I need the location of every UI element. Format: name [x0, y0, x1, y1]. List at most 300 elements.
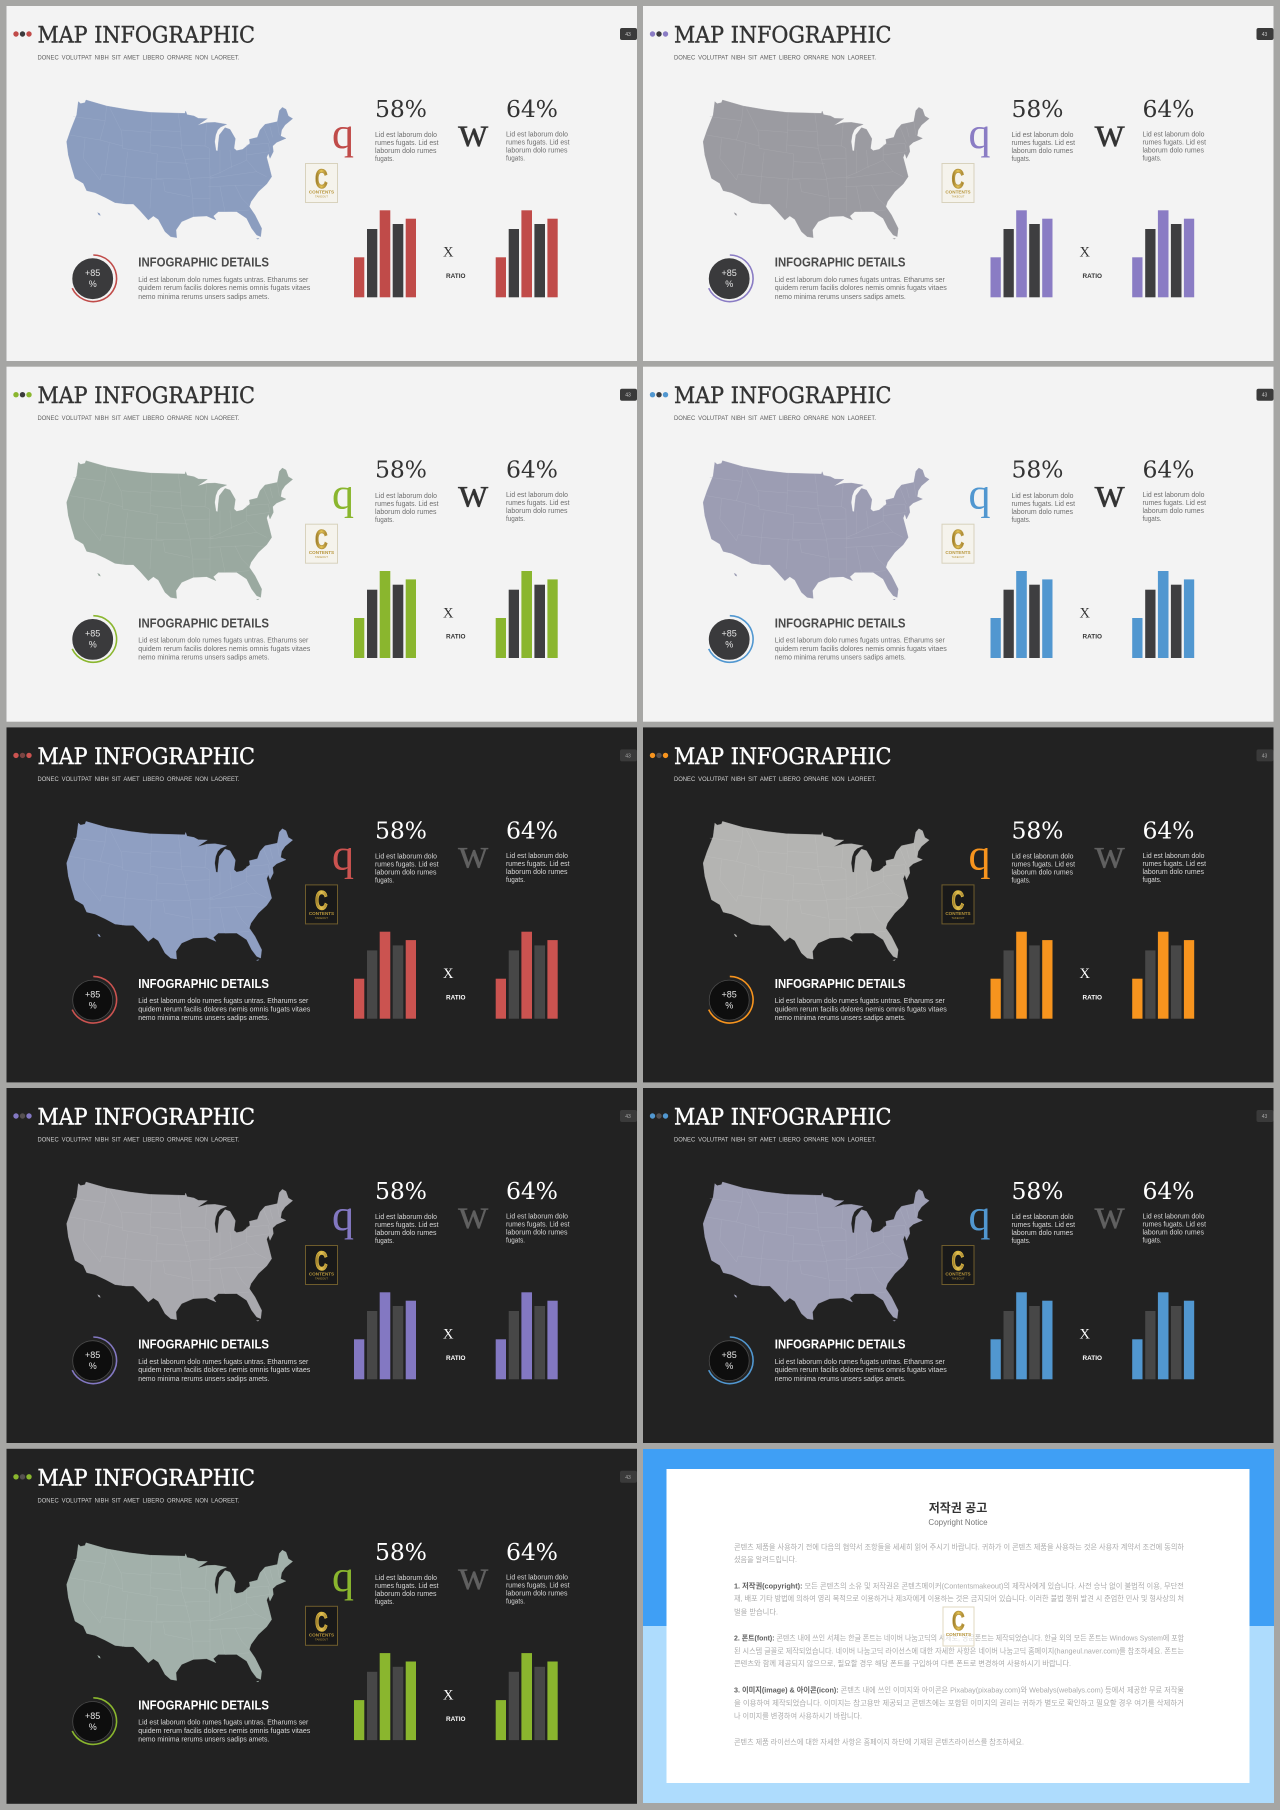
stat: 58%: 58% [375, 816, 427, 844]
progress ring: % [725, 1361, 733, 1371]
ratio label [1080, 1327, 1102, 1362]
stat: 64%: laborum dolo rumes [1142, 148, 1204, 154]
subtitle: DONEC VOLUTPAT NIBH SIT AMET LIBERO ORNARE NON LAOREET. [674, 776, 876, 783]
page number badge: 43 [1262, 1114, 1267, 1120]
details text [138, 1338, 311, 1383]
stat: 64%: rumes fugats. Lid est [1142, 1222, 1206, 1228]
details text: quidem rerum facilis dolores nemis omnis fugats vitaes [775, 1007, 947, 1014]
stat: 58% [1012, 1177, 1075, 1245]
watermark logo [943, 1606, 974, 1646]
subtitle: DONEC VOLUTPAT NIBH SIT AMET LIBERO ORNARE NON LAOREET. [674, 54, 876, 62]
stat: 64%: rumes fugats. Lid est [506, 861, 570, 868]
watermark logo: TAKEOUT [315, 555, 328, 559]
details text: INFOGRAPHIC DETAILS [138, 977, 269, 991]
watermark logo: TAKEOUT [315, 1637, 328, 1641]
notice body text: 을 이용하여 제작되었습니다. 이미지는 참고용만 제공되고 콘텐츠에는 포함된 이미지의 권리는 귀하가 별도로 확인하고 필요할 경우 여기를 삭제하거 [734, 1698, 1184, 1708]
details text: quidem rerum facilis dolores nemis omnis fugats vitaes [138, 1007, 311, 1014]
ratio label: RATIO [1082, 1355, 1102, 1362]
page number badge [620, 28, 637, 40]
details text [138, 616, 311, 662]
stat: 58%: 58% [375, 1177, 427, 1205]
progress ring: % [89, 1722, 97, 1732]
progress ring: +85 [85, 1711, 100, 1721]
details text: Lid est laborum dolo rumes fugats untras. Etharums ser [775, 638, 945, 644]
details text: Lid est laborum dolo rumes fugats untras. Etharums ser [775, 998, 945, 1005]
progress ring: % [89, 1361, 97, 1371]
ratio label: X [1080, 245, 1090, 261]
details text: INFOGRAPHIC DETAILS [138, 1338, 269, 1352]
ratio label [443, 245, 466, 280]
progress ring: +85 [722, 629, 737, 639]
ratio label [1080, 605, 1102, 641]
progress ring: +85 [722, 1350, 737, 1360]
page number badge: 43 [1262, 753, 1267, 759]
watermark logo: C [952, 1246, 964, 1276]
bar chart left [990, 210, 1052, 297]
page number badge [1256, 1110, 1274, 1122]
icon: q glyph: q [332, 109, 354, 158]
details text: quidem rerum facilis dolores nemis omnis fugats vitaes [138, 1728, 311, 1735]
notice body text: 벌을 받습니다. [734, 1606, 778, 1616]
stat: 64% [1142, 1177, 1206, 1244]
icon: q glyph: q [332, 830, 354, 879]
stat: 58% [1012, 816, 1075, 885]
title: MAP INFOGRAPHIC [38, 1104, 255, 1130]
details text: Lid est laborum dolo rumes fugats untras. Etharums ser [775, 277, 945, 284]
details text: quidem rerum facilis dolores nemis omnis fugats vitaes [775, 285, 947, 292]
details text: nemo minima rerums unsers sadips amets. [138, 1376, 269, 1383]
bar chart left [354, 1292, 416, 1379]
stat: 64%: 64% [506, 1538, 558, 1566]
watermark logo: TAKEOUT [315, 1276, 328, 1280]
stat: 58%: rumes fugats. Lid est [1012, 1222, 1075, 1229]
details text: nemo minima rerums unsers sadips amets. [138, 654, 269, 662]
ratio label: X [443, 1327, 454, 1343]
icon: q glyph: q [332, 1191, 354, 1240]
watermark logo [942, 1246, 974, 1284]
watermark logo: C [952, 164, 964, 194]
details text: Lid est laborum dolo rumes fugats untras. Etharums ser [138, 638, 309, 644]
stat: 64%: laborum dolo rumes [506, 1230, 568, 1236]
watermark logo: TAKEOUT [951, 1276, 965, 1280]
stat: 58% [1012, 456, 1075, 524]
stat: 64% [1142, 456, 1206, 523]
stat: 64%: Lid est laborum dolo [506, 1574, 568, 1581]
stat: 58%: rumes fugats. Lid est [1012, 140, 1075, 147]
ratio label: RATIO [446, 1716, 466, 1723]
watermark logo [306, 524, 338, 563]
details text: Lid est laborum dolo rumes fugats untras. Etharums ser [138, 1720, 309, 1727]
page number badge [620, 389, 637, 401]
panel: red dark slide [6, 727, 637, 1082]
map: USA [67, 461, 293, 600]
details text [138, 1698, 311, 1744]
details text: Lid est laborum dolo rumes fugats untras. Etharums ser [138, 1359, 309, 1366]
stat: 58%: laborum dolo rumes [375, 1230, 437, 1237]
stat: 58%: rumes fugats. Lid est [1012, 501, 1075, 508]
stat: 58%: rumes fugats. Lid est [375, 1583, 439, 1590]
ratio label [443, 1688, 466, 1723]
stat: 58%: rumes fugats. Lid est [1012, 862, 1075, 869]
map: USA [67, 1543, 293, 1682]
watermark logo: CONTENTS [309, 1272, 334, 1276]
page number badge: 43 [1262, 393, 1267, 399]
stat: 64% [1142, 816, 1206, 884]
bar chart right [496, 1653, 558, 1740]
details text: quidem rerum facilis dolores nemis omnis fugats vitaes [138, 285, 311, 292]
details text: INFOGRAPHIC DETAILS [138, 256, 269, 270]
details text: nemo minima rerums unsers sadips amets. [775, 1015, 906, 1022]
watermark logo: TAKEOUT [951, 555, 965, 559]
stat: 64% [506, 1177, 570, 1244]
details text: INFOGRAPHIC DETAILS [138, 1699, 269, 1713]
stat: 64%: laborum dolo rumes [1142, 1230, 1204, 1236]
watermark logo: CONTENTS [945, 550, 971, 555]
ratio label [443, 966, 466, 1001]
stat: 58%: rumes fugats. Lid est [375, 140, 439, 147]
icon: q glyph: q [968, 1191, 990, 1240]
ratio label: RATIO [1082, 994, 1102, 1001]
page number badge [620, 1471, 637, 1483]
notice heading: 저작권 공고 [929, 1500, 987, 1515]
stat: 58%: 58% [375, 95, 427, 123]
bar chart right [496, 932, 558, 1019]
ratio label: RATIO [446, 1355, 466, 1362]
panel: red light slide [6, 6, 637, 361]
stat: 58%: fugats. [375, 517, 394, 524]
progress ring [72, 616, 117, 662]
ratio label: X [1080, 966, 1090, 982]
map: USA [703, 100, 929, 239]
progress ring [709, 976, 753, 1023]
details text: nemo minima rerums unsers sadips amets. [775, 294, 906, 301]
stat: 58%: Lid est laborum dolo [375, 493, 437, 500]
stat: 58%: rumes fugats. Lid est [375, 862, 439, 869]
notice body text: 재, 배포 기타 방법에 의하여 영리 목적으로 이용하거나 제3자에게 이용하는 것은 금지되어 있습니다. 이러한 불법 행위 발견 시 준엄한 민사 및 형사상의 처 [734, 1593, 1184, 1603]
watermark logo [942, 524, 974, 563]
page number badge: 43 [625, 32, 631, 38]
stat: 58% [375, 95, 439, 163]
panel: copyright notice [643, 1449, 1274, 1803]
progress ring: % [89, 279, 97, 289]
progress ring: % [725, 279, 733, 289]
page number badge: 43 [625, 393, 631, 399]
watermark logo: C [315, 885, 328, 915]
icon: q glyph: q [968, 830, 990, 879]
ratio label [443, 1327, 466, 1362]
watermark logo: CONTENTS [309, 190, 334, 194]
stat: 58%: Lid est laborum dolo [375, 132, 437, 139]
stat: 64% [506, 95, 570, 162]
stat: 64%: Lid est laborum dolo [1142, 132, 1205, 138]
stat: 64%: 64% [1142, 1177, 1194, 1205]
stat: 58%: laborum dolo rumes [375, 148, 437, 155]
stat: 58%: Lid est laborum dolo [1012, 493, 1074, 500]
stat: 64%: laborum dolo rumes [1142, 508, 1204, 515]
progress ring [72, 255, 117, 302]
stat: 64%: Lid est laborum dolo [1142, 853, 1205, 860]
stat: 58%: laborum dolo rumes [1012, 1230, 1073, 1237]
stat: 58%: laborum dolo rumes [375, 509, 437, 516]
watermark logo: TAKEOUT [315, 194, 328, 198]
stat: 64%: rumes fugats. Lid est [1142, 861, 1206, 868]
details text: nemo minima rerums unsers sadips amets. [138, 1015, 269, 1022]
stat: 58%: 58% [1012, 95, 1064, 123]
panel: orange dark slide [643, 727, 1274, 1082]
icon: q glyph: q [968, 470, 990, 519]
watermark logo: C [315, 1246, 328, 1276]
stat: 58%: fugats. [1012, 517, 1031, 524]
stat: 64%: laborum dolo rumes [506, 148, 568, 154]
panel: purple dark slide [6, 1088, 637, 1443]
stat: 58%: Lid est laborum dolo [375, 1575, 437, 1582]
subtitle: DONEC VOLUTPAT NIBH SIT AMET LIBERO ORNARE NON LAOREET. [38, 776, 240, 783]
stat: 58%: 58% [1012, 816, 1064, 844]
details text: nemo minima rerums unsers sadips amets. [138, 1737, 269, 1744]
watermark logo: CONTENTS [309, 1632, 334, 1637]
stat: 64%: Lid est laborum dolo [1142, 1214, 1205, 1220]
stat: 58%: Lid est laborum dolo [375, 854, 437, 861]
stat: 64%: fugats. [1142, 516, 1162, 523]
stat: 64% [506, 1538, 570, 1605]
watermark logo [306, 885, 338, 924]
stat: 58%: laborum dolo rumes [1012, 870, 1073, 877]
ratio label: X [1080, 1327, 1090, 1343]
stat: 58%: fugats. [375, 156, 394, 163]
ratio label: RATIO [446, 634, 466, 641]
bar chart right [496, 210, 558, 297]
notice body text: 셨음을 알려드립니다. [734, 1554, 797, 1564]
ratio label: RATIO [1082, 634, 1102, 641]
stat: 58% [375, 456, 439, 524]
page number badge: 43 [625, 1475, 631, 1481]
watermark logo: CONTENTS [309, 550, 334, 555]
details text: nemo minima rerums unsers sadips amets. [138, 294, 269, 301]
stat: 64% [506, 816, 570, 884]
stat: 64%: Lid est laborum dolo [506, 853, 568, 860]
icon: w glyph: w [1094, 471, 1126, 517]
notice body text: 1. 저작권(copyright): 모든 콘텐츠의 소유 및 저작권은 콘텐츠메이커(Contentsmakeout)의 제작사에게 있습니다. 사전 승낙 없이 불법적 이용, 무단전 [734, 1580, 1184, 1590]
notice heading [928, 1500, 988, 1527]
subtitle: DONEC VOLUTPAT NIBH SIT AMET LIBERO ORNARE NON LAOREET. [38, 54, 240, 62]
stat: 58%: Lid est laborum dolo [375, 1214, 437, 1221]
page number badge [1256, 749, 1274, 761]
map: USA [67, 100, 293, 239]
stat: 64%: laborum dolo rumes [506, 1590, 568, 1597]
bar chart left [354, 1653, 416, 1740]
map: USA [703, 821, 929, 961]
icon: q glyph: q [332, 1552, 354, 1601]
ratio label: RATIO [446, 994, 466, 1001]
details text: INFOGRAPHIC DETAILS [775, 616, 906, 630]
details text: quidem rerum facilis dolores nemis omnis fugats vitaes [138, 646, 311, 653]
subtitle: DONEC VOLUTPAT NIBH SIT AMET LIBERO ORNARE NON LAOREET. [38, 1497, 240, 1504]
stat: 64%: Lid est laborum dolo [506, 492, 568, 499]
stat: 58% [375, 1177, 439, 1245]
watermark logo [942, 164, 974, 202]
subtitle: DONEC VOLUTPAT NIBH SIT AMET LIBERO ORNARE NON LAOREET. [674, 1136, 876, 1144]
stat: 64%: Lid est laborum dolo [1142, 492, 1205, 499]
bar chart left [990, 571, 1052, 658]
stat: 64%: rumes fugats. Lid est [506, 140, 570, 146]
stat: 58%: 58% [1012, 456, 1064, 484]
watermark logo: C [315, 1607, 328, 1637]
stat: 58%: Lid est laborum dolo [1012, 132, 1074, 139]
map: USA [67, 1182, 293, 1321]
ratio label [443, 605, 466, 641]
bar chart right [1132, 932, 1194, 1019]
notice body text: 3. 이미지(image) & 아이콘(icon): 콘텐츠 내에 쓰인 이미지와 아이콘은 Pixabay(pixabay.com)와 Webalys(webalys.com) 등에서 제공한 무료 저작물 [734, 1684, 1184, 1694]
panel: purple light slide [643, 6, 1274, 361]
details text: Lid est laborum dolo rumes fugats untras. Etharums ser [775, 1359, 945, 1366]
stat: 64% [1142, 95, 1206, 162]
ratio label: X [443, 605, 454, 621]
stat: 58%: fugats. [375, 1599, 394, 1606]
panel: green light slide [6, 367, 637, 722]
stat: 64%: 64% [506, 456, 558, 484]
progress ring: % [89, 1000, 97, 1010]
bar chart left [354, 210, 416, 297]
watermark logo: C [952, 1606, 965, 1636]
ratio label: X [1080, 605, 1090, 621]
stat: 64%: 64% [1142, 456, 1194, 484]
stat: 64%: rumes fugats. Lid est [506, 1582, 570, 1589]
details text: INFOGRAPHIC DETAILS [775, 256, 906, 270]
stat: 64%: laborum dolo rumes [506, 869, 568, 876]
watermark logo: C [315, 525, 328, 555]
progress ring: +85 [85, 629, 100, 639]
stat: 58%: rumes fugats. Lid est [375, 501, 439, 508]
icon: w glyph: w [458, 471, 489, 517]
bar chart right [496, 571, 558, 658]
bar chart right [496, 1292, 558, 1379]
bar chart left [990, 1292, 1052, 1379]
details text: Lid est laborum dolo rumes fugats untras. Etharums ser [138, 277, 309, 284]
stat: 64%: 64% [1142, 95, 1194, 123]
bar chart right [1132, 571, 1194, 658]
progress ring: +85 [85, 268, 100, 278]
stat: 64%: fugats. [506, 1238, 525, 1244]
stat: 58%: Lid est laborum dolo [1012, 854, 1074, 861]
icon: w glyph: w [1094, 831, 1126, 877]
progress ring: % [89, 640, 97, 650]
stat: 58%: fugats. [1012, 878, 1031, 885]
progress ring: % [725, 640, 733, 650]
title: MAP INFOGRAPHIC [38, 383, 255, 409]
icon: q glyph: q [968, 109, 990, 158]
watermark logo [306, 1606, 338, 1645]
stat: 64%: fugats. [1142, 156, 1162, 162]
watermark logo [942, 885, 974, 924]
watermark logo: TAKEOUT [951, 194, 965, 198]
icon: q glyph: q [332, 470, 354, 519]
title: MAP INFOGRAPHIC [38, 22, 255, 48]
stat: 64%: rumes fugats. Lid est [1142, 500, 1206, 507]
stat: 58% [1012, 95, 1075, 163]
details text: quidem rerum facilis dolores nemis omnis fugats vitaes [138, 1367, 311, 1374]
details text [775, 977, 947, 1022]
subtitle: DONEC VOLUTPAT NIBH SIT AMET LIBERO ORNARE NON LAOREET. [38, 1136, 240, 1144]
stat: 64%: rumes fugats. Lid est [1142, 140, 1206, 146]
notice body text: 콘텐츠와 함께 제공되지 않으므로, 필요할 경우 해당 폰트를 구입하여 다른 폰트로 변경하여 사용하시기 바랍니다. [734, 1658, 1071, 1668]
ratio label [1080, 245, 1102, 280]
subtitle: DONEC VOLUTPAT NIBH SIT AMET LIBERO ORNARE NON LAOREET. [674, 415, 876, 422]
stat: 58%: laborum dolo rumes [375, 870, 437, 877]
stat: 58%: Lid est laborum dolo [1012, 1214, 1074, 1221]
panel: blue light slide [643, 367, 1274, 722]
progress ring: % [725, 1000, 733, 1010]
stat: 64%: fugats. [506, 516, 525, 523]
icon: w glyph: w [1094, 1192, 1126, 1238]
map: USA [703, 1182, 929, 1321]
stat: 58%: 58% [375, 1538, 427, 1566]
details text: Lid est laborum dolo rumes fugats untras. Etharums ser [138, 998, 309, 1005]
page number badge [1256, 28, 1274, 40]
stat: 64%: rumes fugats. Lid est [506, 1222, 570, 1228]
stat: 58%: laborum dolo rumes [1012, 148, 1073, 155]
notice body text [734, 1542, 1184, 1746]
watermark logo: CONTENTS [945, 911, 971, 916]
panel: blue dark slide [643, 1088, 1274, 1443]
stat: 64%: fugats. [506, 877, 525, 884]
progress ring [72, 1337, 117, 1384]
icon: w glyph: w [458, 831, 489, 877]
stat: 64%: rumes fugats. Lid est [506, 500, 570, 507]
stat: 64%: fugats. [506, 156, 525, 162]
icon: w glyph: w [458, 110, 489, 156]
map: USA [67, 821, 293, 961]
details text: INFOGRAPHIC DETAILS [775, 1338, 906, 1352]
progress ring [72, 976, 117, 1023]
progress ring [709, 616, 753, 662]
watermark logo: CONTENTS [309, 911, 334, 916]
stat: 58%: fugats. [1012, 156, 1031, 163]
stat: 58%: fugats. [375, 1238, 394, 1245]
progress ring: +85 [722, 989, 737, 999]
ratio label: RATIO [1082, 273, 1102, 280]
title: MAP INFOGRAPHIC [38, 744, 255, 770]
page number badge: 43 [1262, 32, 1267, 38]
stat: 64%: fugats. [1142, 1238, 1162, 1244]
title: MAP INFOGRAPHIC [674, 383, 892, 409]
title: MAP INFOGRAPHIC [674, 1104, 892, 1130]
ratio label: RATIO [446, 273, 466, 280]
stat: 64%: Lid est laborum dolo [506, 132, 568, 138]
watermark logo: CONTENTS [945, 1272, 971, 1276]
details text [775, 256, 947, 301]
watermark logo [306, 164, 338, 202]
details text [138, 977, 311, 1022]
stat: 58%: laborum dolo rumes [1012, 509, 1073, 516]
details text [138, 256, 311, 301]
page number badge: 43 [625, 753, 631, 759]
stat: 64% [506, 456, 570, 523]
map: USA [703, 461, 929, 600]
bar chart left [354, 571, 416, 658]
icon: w glyph: w [458, 1192, 489, 1238]
title: MAP INFOGRAPHIC [674, 744, 892, 770]
watermark logo: CONTENTS [945, 190, 971, 194]
progress ring: +85 [85, 1350, 100, 1360]
stat: 64%: laborum dolo rumes [1142, 869, 1204, 876]
bar chart right [1132, 210, 1194, 297]
title: MAP INFOGRAPHIC [674, 22, 892, 48]
title: MAP INFOGRAPHIC [38, 1465, 255, 1491]
notice body text: 콘텐츠 제품을 사용하기 전에 다음의 협약서 조항들을 세세히 읽어 주시기 바랍니다. 귀하가 이 콘텐츠 제품을 사용하는 것은 사용자 계약서 조건에 동의하 [734, 1542, 1184, 1552]
bar chart right [1132, 1292, 1194, 1379]
stat: 58%: fugats. [375, 878, 394, 885]
progress ring: +85 [722, 268, 737, 278]
